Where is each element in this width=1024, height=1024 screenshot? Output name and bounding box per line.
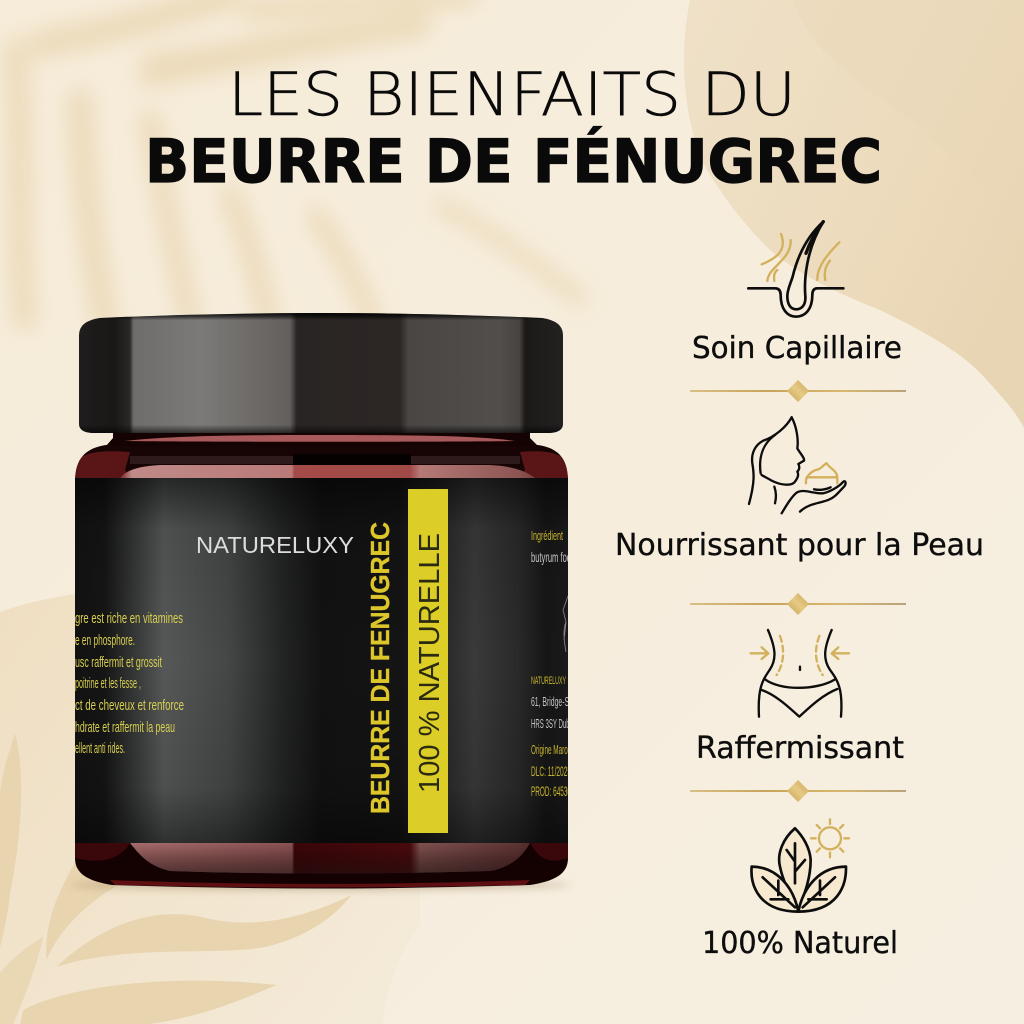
label: raffermissant: Raffermissant	[696, 731, 904, 766]
right label details: butyrum foe	[531, 549, 571, 565]
benefit: 100% naturel	[702, 819, 898, 961]
left label description: gre est riche en vitamines	[75, 611, 183, 627]
label: 100% naturel: 100% Naturel	[702, 926, 898, 961]
background: bottom-left tan area	[0, 570, 420, 1024]
left label description: poitrine et les fesse ,	[75, 676, 141, 692]
left label description: usc raffermit et grossit	[75, 655, 162, 671]
divider 3	[690, 780, 906, 802]
benefit: raffermissant	[696, 630, 904, 766]
jar shoulder glass	[75, 445, 568, 478]
jar product	[70, 313, 571, 891]
label: nourrissant: Nourrissant pour la Peau	[615, 528, 984, 563]
left label description	[75, 611, 184, 757]
background: right tan curve	[684, 0, 1024, 428]
jar label	[75, 478, 571, 843]
right label details	[531, 529, 571, 799]
jar lid	[79, 313, 563, 433]
jar ground shadow	[70, 880, 570, 890]
icon: waist with arrows	[751, 630, 849, 717]
title line 2: BEURRE DE FÉNUGREC	[145, 125, 882, 197]
left label description: e en phosphore.	[75, 633, 135, 649]
left label description: hdrate et raffermit la peau	[75, 720, 175, 736]
benefit: soin capillaire	[692, 222, 902, 366]
icon: leaves and sun	[751, 819, 849, 912]
icon: hair follicle	[748, 222, 843, 317]
right label details: 61, Bridge-St	[531, 695, 571, 709]
background: inner tan curve	[793, 0, 1024, 240]
background: palm frond bottom-left	[0, 733, 352, 1024]
divider 1	[690, 380, 906, 402]
infographic canvas: PROD: 64530	[531, 783, 571, 799]
label: soin capillaire: Soin Capillaire	[692, 331, 902, 366]
jar neck	[106, 430, 538, 446]
vertical product name: BEURRE DE FENUGREC	[365, 522, 395, 814]
right label details: NATURELUXY	[531, 675, 566, 687]
brand name: NATURELUXY	[196, 532, 354, 558]
right label details: Origine Maroc	[531, 743, 571, 757]
title	[145, 60, 882, 197]
background: blurred palm top-left	[15, 0, 580, 320]
left label description: ct de cheveux et renforce	[75, 698, 184, 714]
icon: face and cream	[749, 417, 846, 513]
yellow band text: 100 % NATURELLE	[414, 533, 446, 793]
right label details: Ingrédient	[531, 529, 563, 543]
left label description: ellent anti rides.	[75, 741, 125, 757]
divider 2	[690, 593, 906, 615]
infographic canvas: HRS 3SY Dubl	[531, 717, 571, 731]
jar bottom glass	[75, 843, 568, 888]
title line 1: LES BIENFAITS DU	[228, 60, 796, 130]
benefit: nourrissant pour la peau	[615, 417, 984, 563]
infographic canvas: DLC: 11/2025	[531, 763, 571, 779]
yellow band	[408, 489, 448, 833]
